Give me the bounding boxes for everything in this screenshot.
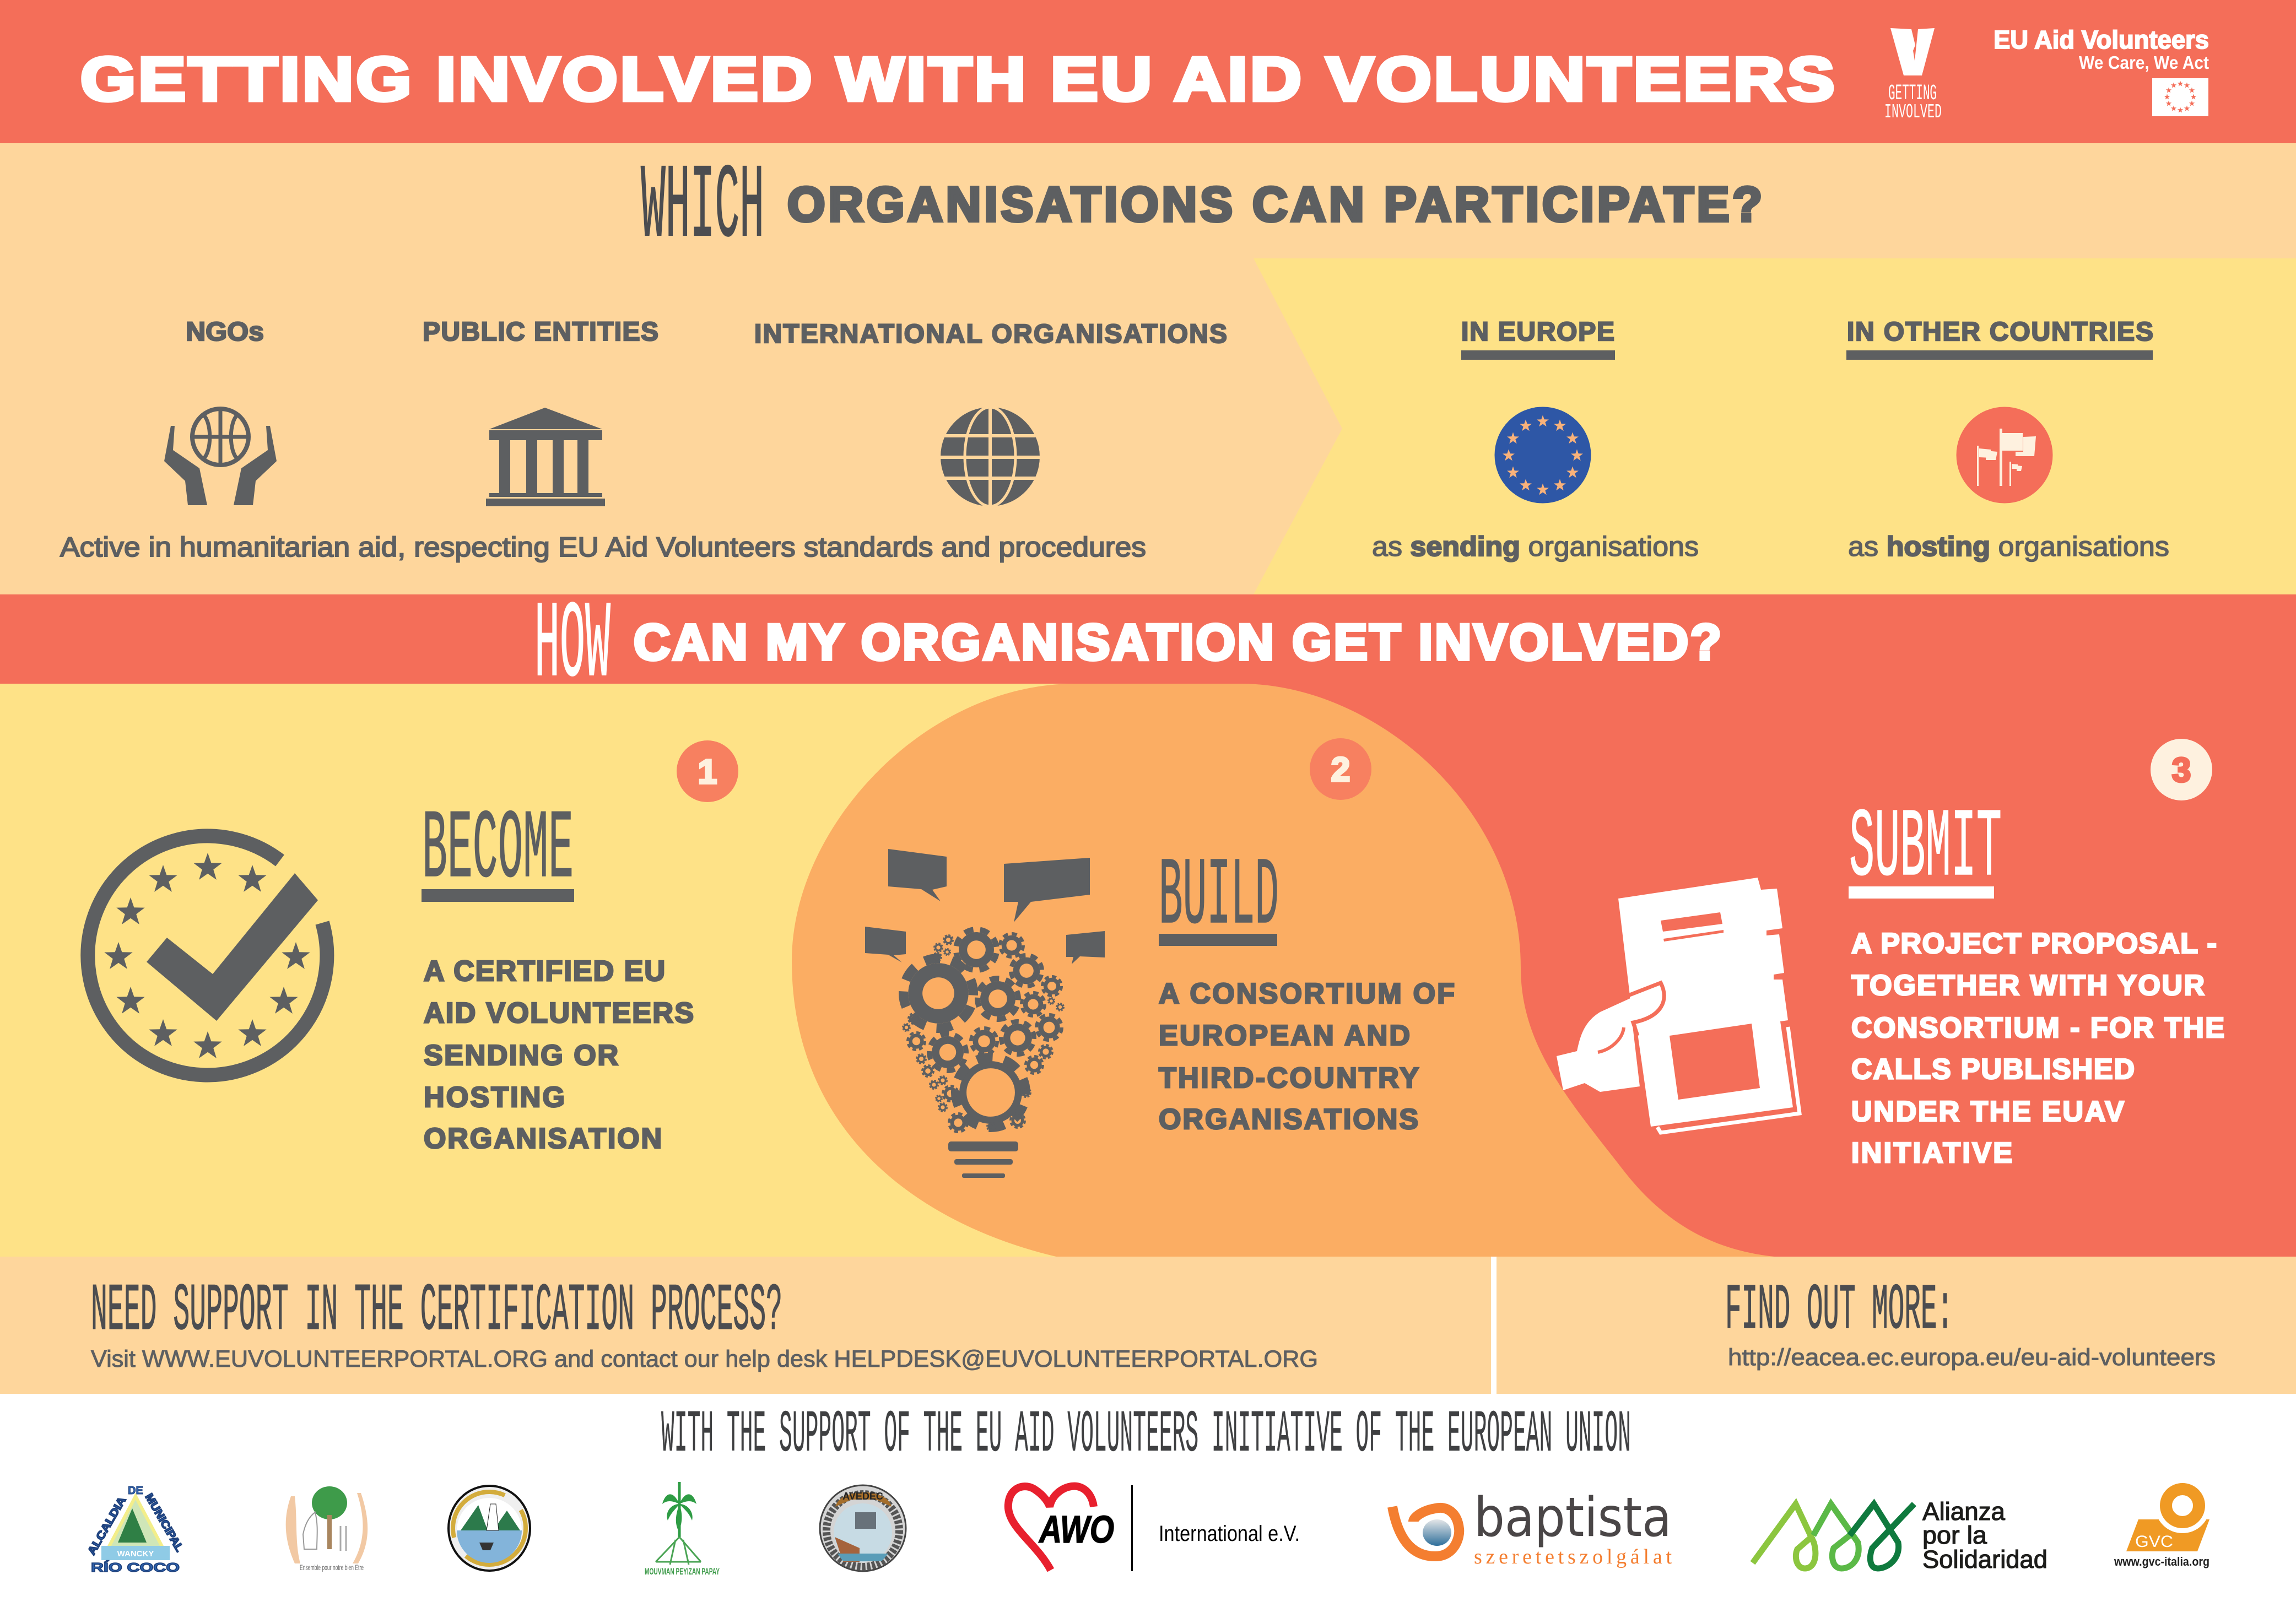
yellow arrow panel <box>1254 258 2296 594</box>
icon: gear light bulb with speech bubbles <box>865 849 1105 1178</box>
column: in Europe: IN EUROPE <box>1461 317 1614 347</box>
text: a consortium: EUROPEAN AND <box>1159 1020 1410 1052</box>
logo: Alcaldia Rio Coco: RÍO COCO <box>91 1560 180 1574</box>
logo: baptista <box>1392 1486 1672 1568</box>
text: a consortium: ORGANISATIONS <box>1159 1103 1418 1135</box>
text: a consortium <box>1159 978 1455 1135</box>
icon: hands holding globe <box>164 409 277 505</box>
step 1: become: BECOME <box>422 796 574 906</box>
column: NGOs <box>164 317 277 505</box>
text: a certified organisation: SENDING OR <box>424 1040 618 1072</box>
text: a project proposal: UNDER THE EUAV <box>1851 1096 2124 1128</box>
logo: V getting involved: GETTING <box>1888 82 1937 106</box>
logo: AVEDEC seal <box>820 1485 906 1571</box>
logo: EU Aid Volunteers: We Care, We Act <box>2079 52 2209 73</box>
panel: need support: Visit WWW.EUVOLUNTEERPORTAL.ORG and contact our help desk HELPDESK@EUVOLUNTEERPORTAL.ORG <box>91 1346 1318 1372</box>
text: a project proposal: CONSORTIUM - FOR THE <box>1851 1012 2224 1044</box>
band: how can my organisation get involved: CAN MY ORGANISATION GET INVOLVED? <box>634 614 1721 670</box>
icon: hand holding folder <box>1557 878 1800 1133</box>
step 3: submit <box>1557 739 2224 1169</box>
column: in other countries <box>1846 317 2169 562</box>
icon: globe <box>937 407 1044 506</box>
step 1: become <box>88 740 738 1155</box>
text: a certified organisation: HOSTING <box>424 1081 565 1113</box>
column: in other countries: IN OTHER COUNTRIES <box>1847 317 2153 347</box>
logo: Mouvman Peyizan Papay: MOUVMAN PEYIZAN PAPAY <box>645 1566 720 1577</box>
logo: baptista: baptista <box>1474 1486 1672 1549</box>
logo: AWO International <box>1008 1485 1300 1571</box>
logo: Alcaldia Rio Coco <box>85 1485 186 1574</box>
logo: lighthouse seal <box>449 1486 530 1571</box>
badge 3: 3 <box>2172 751 2191 789</box>
heading: become <box>422 796 574 906</box>
panel: which organisations <box>0 143 2296 594</box>
logo: Alianza por la Solidaridad <box>1753 1497 2048 1573</box>
band: how can my organisation get involved: HOW <box>534 585 611 708</box>
heading: which organisations can participate: ORGANISATIONS CAN PARTICIPATE? <box>787 177 1762 231</box>
title: GETTING INVOLVED WITH EU AID VOLUNTEERS <box>80 45 1837 113</box>
logo: baptista: szeretetszolgálat <box>1474 1545 1672 1568</box>
logo: Alcaldia Rio Coco: WANCKY <box>117 1549 154 1559</box>
text: a project proposal: INITIATIVE <box>1851 1137 2012 1169</box>
panel: need support <box>0 1257 1491 1394</box>
text: a consortium: THIRD-COUNTRY <box>1159 1062 1419 1094</box>
text: a consortium: A CONSORTIUM OF <box>1159 978 1455 1010</box>
panel: find out more: FIND OUT MORE: <box>1725 1275 1953 1348</box>
icon: temple <box>486 408 605 506</box>
logo: Alianza por la Solidaridad: Solidaridad <box>1922 1545 2048 1573</box>
icon: flags circle <box>1956 407 2053 504</box>
heading: submit <box>1849 793 2002 903</box>
logo: V getting involved <box>1884 28 1942 123</box>
text: a certified organisation: A CERTIFIED EU <box>424 955 665 987</box>
logo: AWO International: International e.V. <box>1159 1522 1300 1546</box>
text: a certified organisation: AID VOLUNTEERS <box>424 997 694 1029</box>
heading: build <box>1159 843 1279 951</box>
badge 2 <box>1310 738 1371 800</box>
text: a project proposal: TOGETHER WITH YOUR <box>1851 970 2205 1002</box>
logo: AWO International: AWO <box>1038 1508 1114 1551</box>
text: a certified organisation <box>424 955 694 1155</box>
badge 2: 2 <box>1331 751 1350 789</box>
logo: AVEDEC seal: AVEDEC <box>842 1491 883 1502</box>
column: public entities <box>423 317 658 506</box>
panel: find out more: http://eacea.ec.europa.eu/eu-aid-volunteers <box>1728 1344 2216 1371</box>
logo: GVC: GVC <box>2135 1533 2173 1551</box>
logo: Alcaldia Rio Coco: MUNICIPAL <box>143 1492 186 1554</box>
column: in Europe <box>1372 317 1699 562</box>
panel: find out more <box>1497 1257 2296 1394</box>
text: a project proposal: A PROJECT PROPOSAL - <box>1851 928 2217 960</box>
column: NGOs: NGOs <box>186 317 264 347</box>
logo: Alianza por la Solidaridad: por la <box>1922 1521 1987 1549</box>
text: a project proposal: CALLS PUBLISHED <box>1851 1053 2135 1085</box>
icon: certified check <box>88 836 327 1075</box>
panel: need support: NEED SUPPORT IN THE CERTIFICATION PROCESS? <box>91 1274 782 1349</box>
column: in other countries: as hosting organisations <box>1848 531 2169 562</box>
panel: steps background <box>0 684 2296 1257</box>
column: international organisations <box>754 320 1227 506</box>
icon: EU flag circle <box>1494 407 1591 504</box>
heading: which organisations can participate <box>641 149 1762 267</box>
logo: Alcaldia Rio Coco: ALCALDIA <box>85 1495 128 1557</box>
column: international organisations: INTERNATIONAL ORGANISATIONS <box>754 320 1227 349</box>
logo: hands and tree <box>286 1486 368 1572</box>
step 2: build: BUILD <box>1159 843 1279 951</box>
header banner <box>0 0 2296 143</box>
badge 3 <box>2151 739 2212 800</box>
column: public entities: PUBLIC ENTITIES <box>423 317 658 347</box>
text: a project proposal <box>1851 928 2224 1169</box>
logo: Mouvman Peyizan Papay <box>645 1482 720 1577</box>
logo: EU Aid Volunteers <box>1994 25 2209 116</box>
step 3: submit: SUBMIT <box>1849 793 2002 903</box>
badge 1 <box>677 740 738 802</box>
text: a certified organisation: ORGANISATION <box>424 1123 662 1155</box>
logo: GVC <box>2114 1478 2210 1568</box>
column: in Europe: as sending organisations <box>1372 531 1699 562</box>
heading: which organisations can participate: WHICH <box>641 149 764 267</box>
text: active in humanitarian aid: Active in humanitarian aid, respecting EU Aid Volunteers standards and procedures <box>60 532 1146 562</box>
logo: GVC: www.gvc-italia.org <box>2114 1555 2209 1568</box>
logo: EU Aid Volunteers: EU Aid Volunteers <box>1994 25 2209 54</box>
logo: Alcaldia Rio Coco: DE <box>128 1485 143 1497</box>
step 2: build <box>865 738 1455 1178</box>
badge 1: 1 <box>698 753 717 791</box>
logo: hands and tree: Ensemble pour notre bien Etre <box>300 1563 364 1572</box>
logo: V getting involved: INVOLVED <box>1884 101 1942 123</box>
band: how can my organisation get involved <box>0 585 2296 708</box>
logo: Alianza por la Solidaridad: Alianza <box>1922 1497 2006 1525</box>
